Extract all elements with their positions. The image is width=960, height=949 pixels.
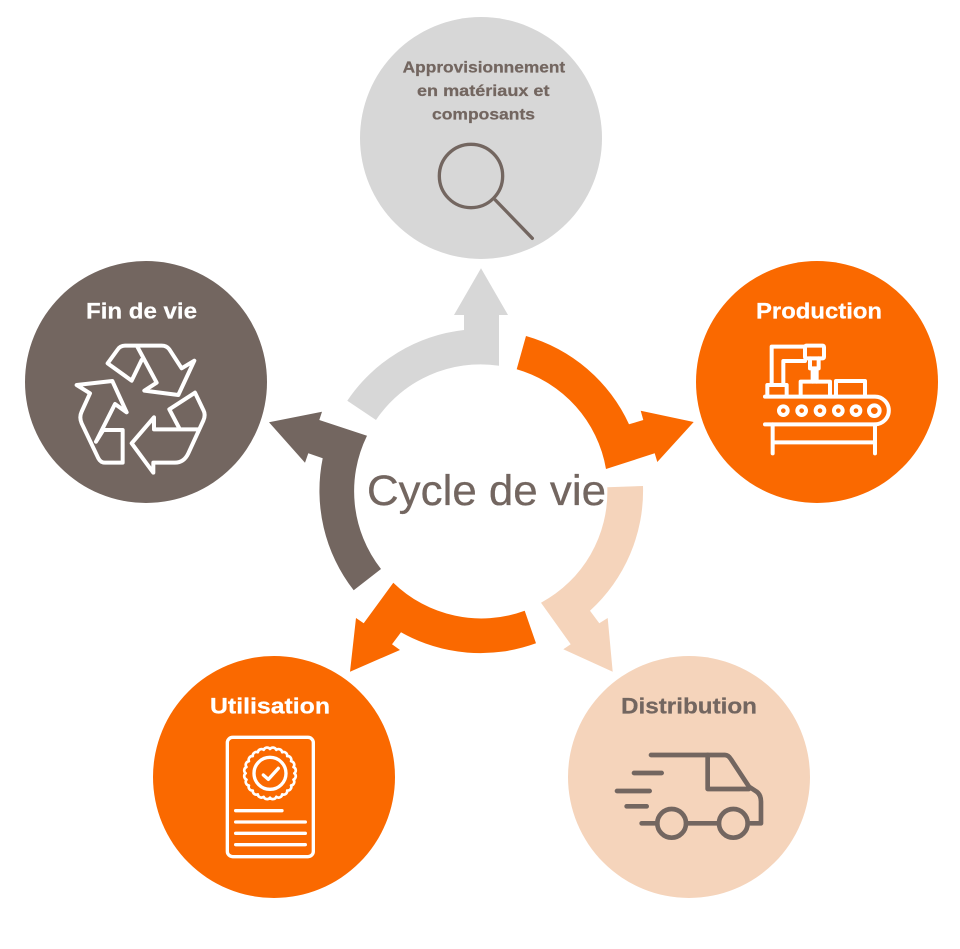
icon: magnifying glass	[439, 144, 532, 238]
icon: delivery truck	[617, 755, 761, 838]
panel: distribution	[568, 656, 810, 898]
panel: fin de vie	[25, 261, 267, 503]
icon: recycling arrows	[77, 346, 205, 473]
arrow: toward production	[517, 336, 694, 469]
panel: production	[696, 261, 938, 503]
center title: Cycle de vie	[367, 467, 606, 515]
heading: approvisionnement	[403, 60, 566, 124]
heading: approvisionnement: Approvisionnement	[403, 60, 566, 76]
arrow: toward approvisionnement, gray	[347, 268, 508, 420]
arrow: toward utilisation	[350, 583, 536, 672]
heading: production: Production	[756, 298, 882, 324]
panel: utilisation	[153, 656, 395, 898]
heading: approvisionnement: composants	[432, 107, 535, 124]
arrow: toward distribution	[541, 486, 643, 672]
icon: conveyor with robot arm	[765, 346, 889, 453]
panel: approvisionnement	[360, 17, 602, 259]
heading: distribution: Distribution	[621, 694, 757, 718]
arrow: toward fin de vie	[269, 412, 381, 590]
heading: utilisation: Utilisation	[210, 694, 330, 718]
heading: fin de vie: Fin de vie	[86, 298, 197, 324]
heading: approvisionnement: en matériaux et	[417, 83, 550, 100]
icon: certificate document	[227, 737, 313, 857]
